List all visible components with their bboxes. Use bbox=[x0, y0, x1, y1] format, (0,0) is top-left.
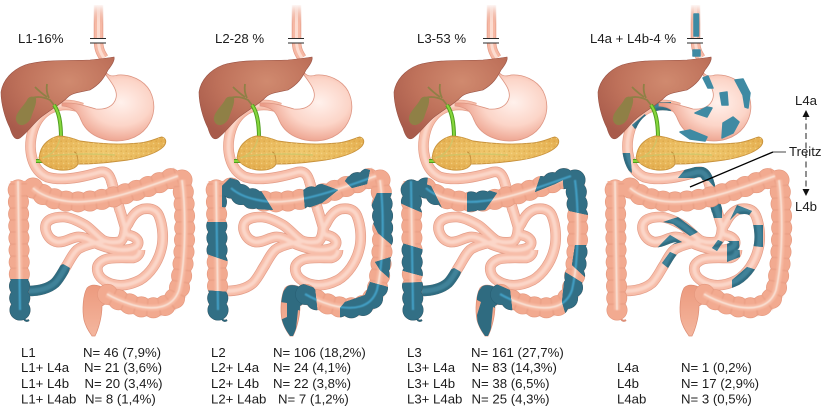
text block: L2 counts: N= 7 (1,2%) bbox=[278, 392, 349, 406]
heading: L1: L1-16% bbox=[18, 31, 64, 46]
panel: L1 bbox=[1, 5, 185, 406]
text block: L1 counts bbox=[21, 345, 163, 406]
text block: L3 counts: N= 83 (14,3%) bbox=[472, 360, 557, 375]
text block: L1 counts: L1+ L4ab bbox=[21, 392, 76, 406]
text block: L3 counts bbox=[407, 345, 564, 406]
text block: L3 counts: L3+ L4a bbox=[407, 360, 456, 375]
arrow: L4a to L4b axis: L4a bbox=[795, 93, 818, 108]
text block: L2 counts: L2+ L4a bbox=[211, 360, 260, 375]
text block: L1 counts: N= 21 (3,6%) bbox=[84, 360, 162, 375]
text block: L4 counts: N= 17 (2,9%) bbox=[681, 376, 759, 391]
panel: L2 bbox=[199, 5, 383, 406]
blue patches on esophagus and stomach bbox=[680, 14, 750, 141]
text block: L3 counts: N= 161 (27,7%) bbox=[471, 345, 564, 360]
panel: L3 bbox=[394, 5, 578, 406]
text block: L2 counts: L2+ L4b bbox=[211, 376, 259, 391]
text block: L4 counts: L4a bbox=[617, 360, 640, 375]
text block: L1 counts: L1+ L4b bbox=[21, 376, 69, 391]
text block: L4 counts: L4ab bbox=[617, 392, 646, 406]
text block: L2 counts: L2+ L4ab bbox=[211, 392, 266, 406]
text block: L2 counts: N= 106 (18,2%) bbox=[273, 345, 366, 360]
text block: L3 counts: N= 25 (4,3%) bbox=[472, 392, 550, 406]
heading: L2: L2-28 % bbox=[215, 31, 264, 46]
Treitz pointer: Treitz bbox=[789, 144, 821, 159]
panel: L4 bbox=[590, 5, 782, 406]
arrow: L4a to L4b axis: L4b bbox=[795, 199, 817, 214]
text block: L3 counts: L3 bbox=[407, 345, 422, 360]
text block: L4 counts: N= 3 (0,5%) bbox=[681, 392, 752, 406]
text block: L3 counts: L3+ L4ab bbox=[407, 392, 462, 406]
text block: L4 counts bbox=[617, 360, 759, 406]
text block: L3 counts: L3+ L4b bbox=[407, 376, 455, 391]
text block: L2 counts: N= 24 (4,1%) bbox=[273, 360, 351, 375]
text block: L3 counts: N= 38 (6,5%) bbox=[472, 376, 550, 391]
text block: L1 counts: L1 bbox=[21, 345, 36, 360]
heading: L3: L3-53 % bbox=[417, 31, 466, 46]
text block: L1 counts: L1+ L4a bbox=[21, 360, 70, 375]
Treitz pointer bbox=[690, 144, 821, 187]
text block: L2 counts bbox=[211, 345, 366, 406]
text block: L2 counts: L2 bbox=[211, 345, 226, 360]
arrow: L4a to L4b axis bbox=[795, 93, 818, 214]
text block: L4 counts: L4b bbox=[617, 376, 639, 391]
text block: L4 counts: N= 1 (0,2%) bbox=[681, 360, 752, 375]
text block: L1 counts: N= 8 (1,4%) bbox=[85, 392, 156, 406]
text block: L1 counts: N= 46 (7,9%) bbox=[83, 345, 161, 360]
text block: L1 counts: N= 20 (3,4%) bbox=[84, 376, 163, 391]
text block: L2 counts: N= 22 (3,8%) bbox=[273, 376, 351, 391]
heading: L4: L4a + L4b-4 % bbox=[590, 31, 676, 46]
